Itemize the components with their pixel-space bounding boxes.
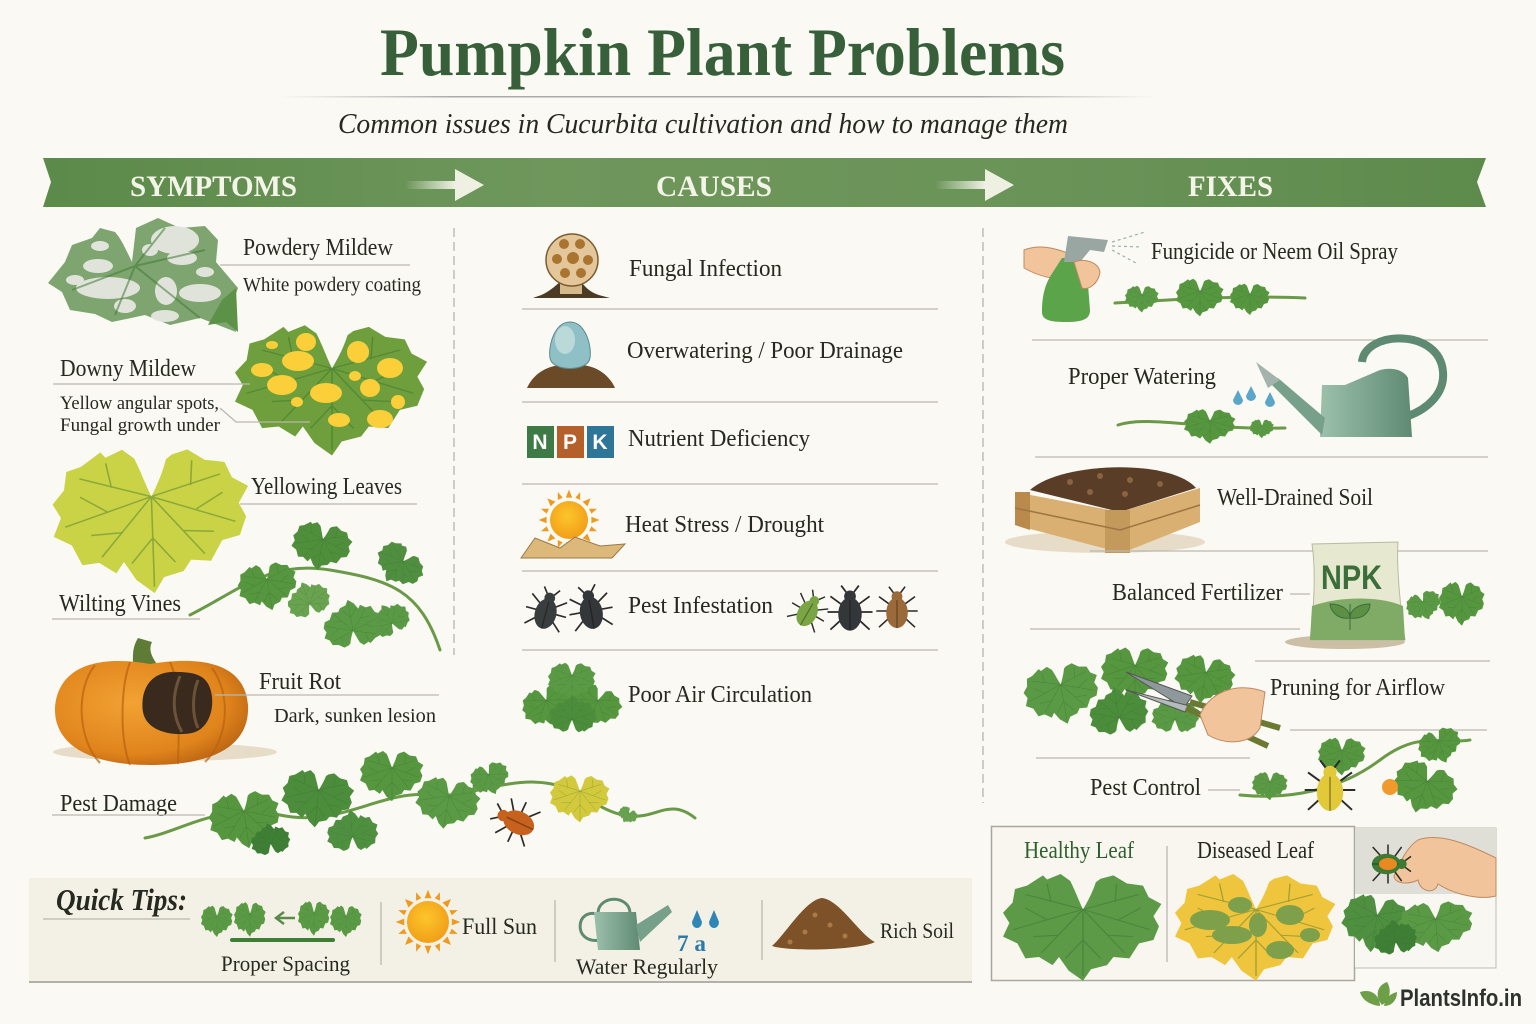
icon: young vine xyxy=(1118,409,1285,444)
label: proper watering: Proper Watering xyxy=(1068,364,1216,390)
label: yellowing leaves: Yellowing Leaves xyxy=(251,474,402,500)
heading: fixes: FIXES xyxy=(1188,170,1273,203)
heading: causes: CAUSES xyxy=(656,170,772,203)
panel: causes xyxy=(517,234,938,735)
icon: spaced seedlings xyxy=(201,901,362,942)
label: nutrient deficiency: Nutrient Deficiency xyxy=(628,426,810,452)
icon: NPK tiles: P xyxy=(563,431,577,454)
label: proper spacing: Proper Spacing xyxy=(221,951,350,976)
title: Pumpkin Plant Problems xyxy=(380,14,1065,90)
panel: fixes xyxy=(1005,232,1490,823)
icon: wilting vine xyxy=(190,519,440,651)
label: downy mildew: Fungal growth under xyxy=(60,415,221,436)
icon: pumpkin with rot xyxy=(53,638,277,765)
panel: symptoms xyxy=(48,218,695,858)
icon: NPK tiles: K xyxy=(592,431,608,454)
label: fruit rot xyxy=(215,669,439,727)
label: rich soil: Rich Soil xyxy=(880,918,954,943)
panel: photo of pest removal xyxy=(1337,828,1496,968)
label: powdery mildew: White powdery coating xyxy=(243,274,421,296)
icon: watering can small xyxy=(580,899,719,950)
label: downy mildew xyxy=(53,356,310,436)
icon: waterlogged egg on roots xyxy=(527,322,615,388)
icon: powdery mildew leaf xyxy=(48,218,238,332)
icon: spray bottle and hand xyxy=(1024,232,1145,322)
arrow: causes to fixes xyxy=(935,169,1014,201)
icon: downy mildew leaf xyxy=(235,325,427,456)
label: fruit rot: Fruit Rot xyxy=(259,669,341,695)
heading: quick tips: Quick Tips: xyxy=(56,882,187,917)
label: downy mildew: Downy Mildew xyxy=(60,356,197,382)
label: fungal infection: Fungal Infection xyxy=(629,256,782,282)
label: pest control: Pest Control xyxy=(1090,775,1201,801)
icon: watering can xyxy=(1233,338,1443,437)
label: heat stress: Heat Stress / Drought xyxy=(625,512,824,538)
icon: foliage being pruned xyxy=(1020,648,1238,738)
icon: NPK fertilizer bag xyxy=(1285,542,1405,649)
panel: leaf comparison xyxy=(992,826,1354,981)
icon: sun over cracked ground xyxy=(521,490,625,558)
label: poor air circulation: Poor Air Circulation xyxy=(628,682,812,708)
label: well-drained soil: Well-Drained Soil xyxy=(1217,485,1373,511)
logo: PlantsInfo.in xyxy=(1360,982,1522,1012)
icon: healthy leaf xyxy=(1003,874,1161,981)
label: water regularly: Water Regularly xyxy=(576,954,718,979)
icon: plant beside bag xyxy=(1403,582,1485,626)
heading: healthy leaf: Healthy Leaf xyxy=(1024,838,1134,864)
icon: pruning shears and hand xyxy=(1126,672,1280,746)
icon: dense foliage xyxy=(517,663,626,735)
icon: NPK tiles: N xyxy=(532,431,548,454)
label: downy mildew: Yellow angular spots, xyxy=(60,393,219,414)
panel: quick tips xyxy=(29,878,972,983)
icon: soil pile xyxy=(772,898,875,949)
icon: pest damaged vine xyxy=(145,751,695,858)
label: fruit rot: Dark, sunken lesion xyxy=(274,705,436,727)
label: watering interval: 7 a xyxy=(677,931,707,956)
label: powdery mildew: Powdery Mildew xyxy=(243,235,394,261)
heading: symptoms: SYMPTOMS xyxy=(130,170,297,203)
label: wilting vines: Wilting Vines xyxy=(59,591,181,617)
icon: green leaves xyxy=(1337,891,1475,958)
label: overwatering: Overwatering / Poor Drainage xyxy=(627,338,903,364)
label: fungicide spray: Fungicide or Neem Oil Spray xyxy=(1151,239,1398,265)
icon: dark beetles xyxy=(522,582,616,634)
label: pest infestation: Pest Infestation xyxy=(628,593,773,619)
icon: fungal spore xyxy=(533,234,610,298)
label: full sun: Full Sun xyxy=(462,914,537,939)
label: pruning: Pruning for Airflow xyxy=(1270,675,1446,701)
icon: NPK tiles xyxy=(527,426,614,458)
icon: treated vine leaves xyxy=(1115,279,1305,316)
label: powdery mildew xyxy=(220,235,421,296)
icon: assorted insects xyxy=(784,584,918,634)
icon: yellowing leaf xyxy=(51,445,252,597)
icon: vine with beetle xyxy=(1240,723,1470,823)
icon: sun xyxy=(396,890,460,954)
subtitle: Common issues in Cucurbita cultivation and how to manage them xyxy=(338,109,1068,140)
icon: hand picking beetle xyxy=(1372,838,1496,897)
heading: diseased leaf: Diseased Leaf xyxy=(1197,838,1314,864)
arrow: symptoms to causes xyxy=(405,169,484,201)
label: pest damage: Pest Damage xyxy=(60,791,177,817)
header banner xyxy=(43,158,1486,207)
icon: raised soil bed xyxy=(1005,467,1205,553)
icon: diseased leaf xyxy=(1175,874,1335,981)
label: balanced fertilizer: Balanced Fertilizer xyxy=(1112,580,1283,606)
icon: NPK fertilizer bag: NPK xyxy=(1321,559,1382,597)
